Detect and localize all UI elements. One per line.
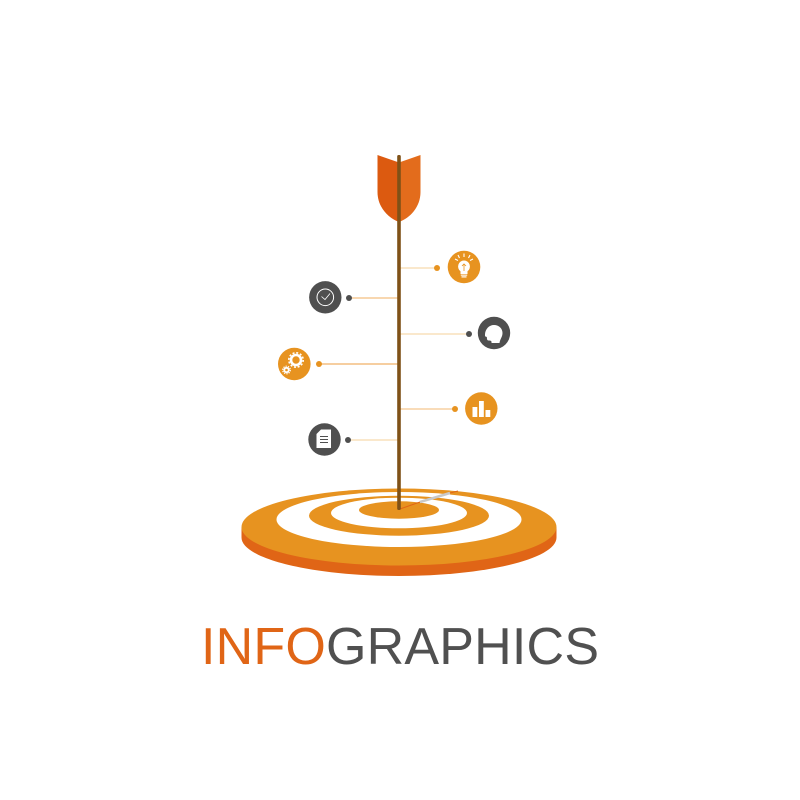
target board (242, 488, 556, 576)
arrow (378, 155, 420, 510)
icon: document (308, 423, 351, 456)
fletching (378, 155, 420, 222)
icon: clock (309, 281, 352, 313)
icon: gears (278, 348, 322, 380)
icon: head (466, 317, 510, 349)
icon: light bulb (434, 251, 480, 283)
icon: bar chart (452, 392, 497, 425)
shaft (397, 155, 401, 510)
title: INFOGRAPHICS (201, 618, 599, 676)
connector lines (319, 268, 469, 440)
arrow shadow on target (400, 491, 458, 509)
